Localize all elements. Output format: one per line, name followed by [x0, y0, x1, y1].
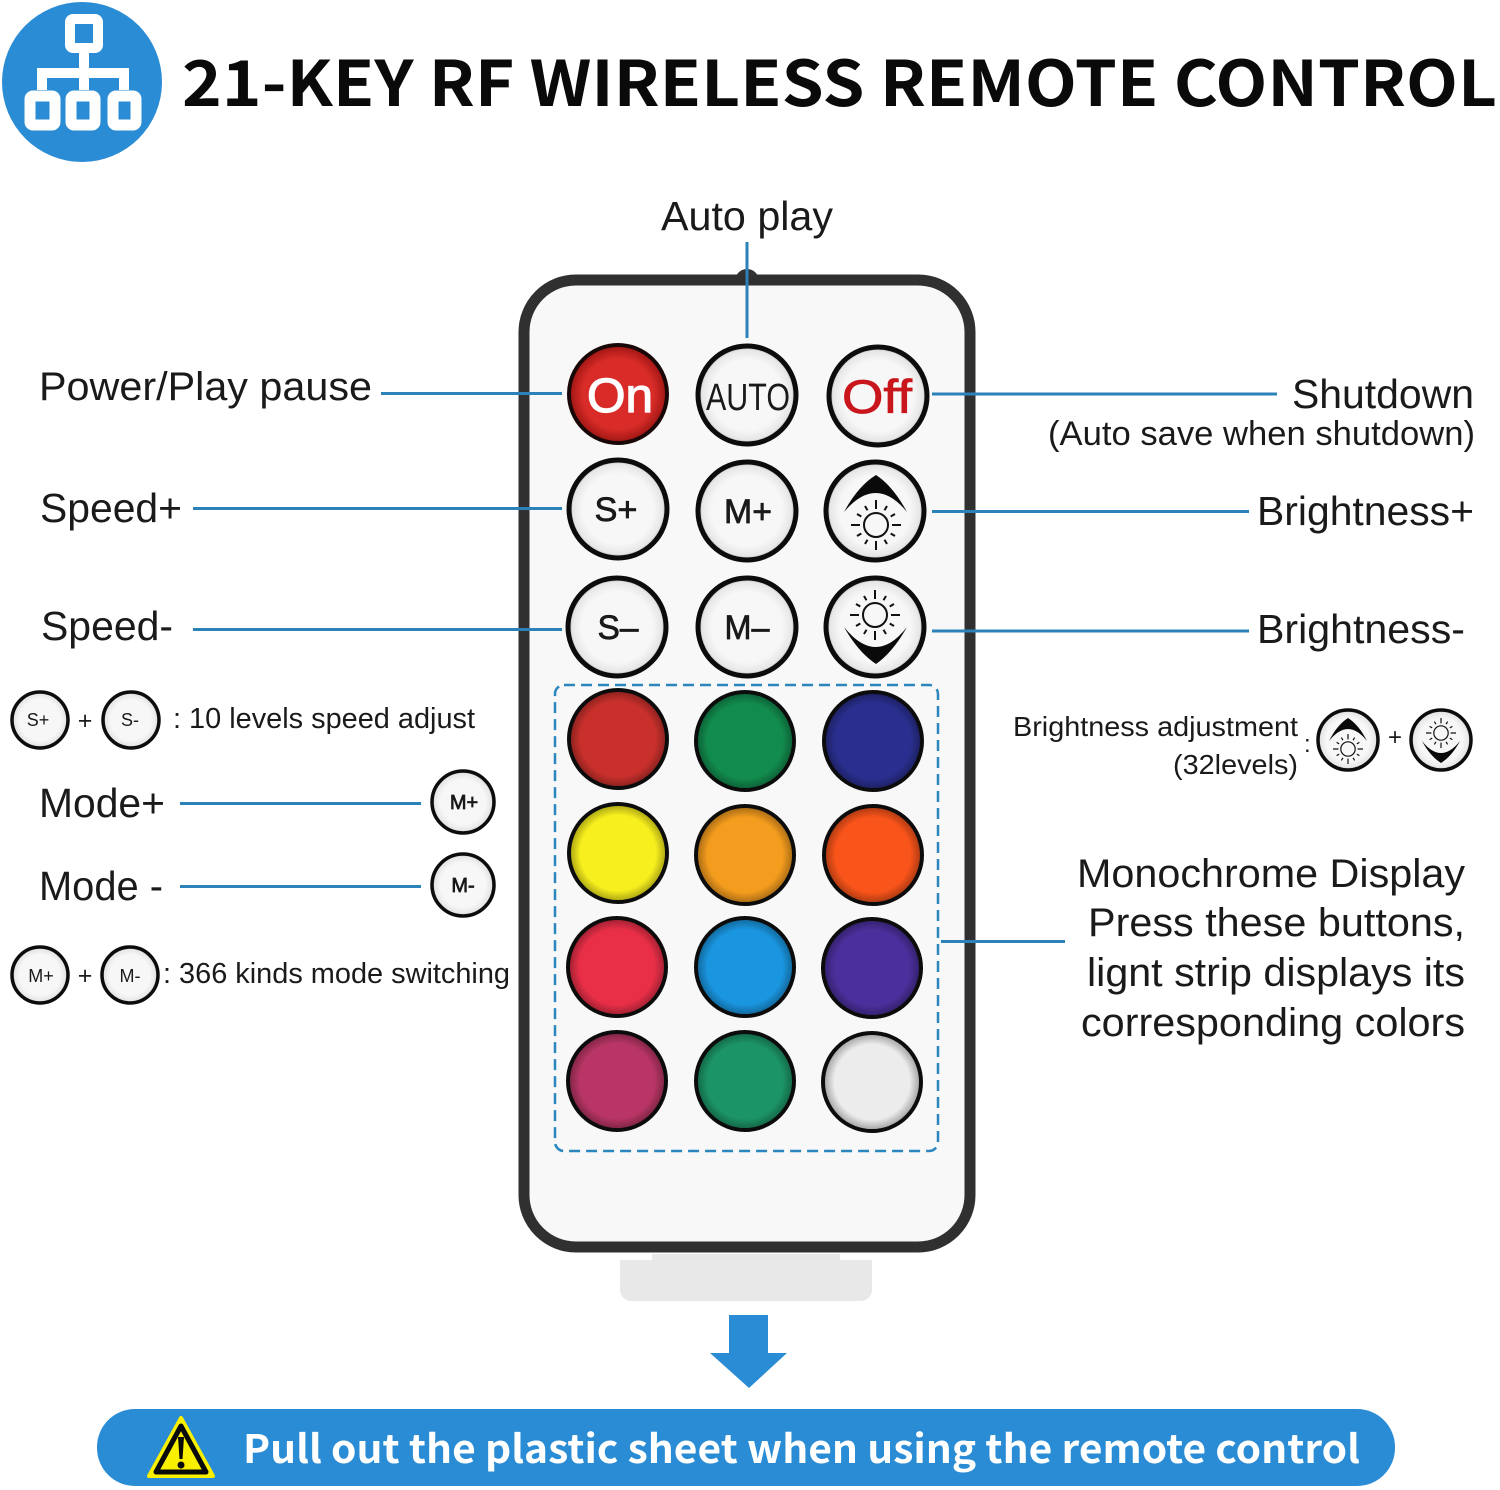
button: On: On: [587, 370, 653, 423]
note: brightness adjustment combination: (32levels): [1173, 749, 1298, 780]
label: Mode+ with button: [39, 771, 494, 833]
button: S+: [569, 460, 667, 558]
button: M-: [698, 578, 796, 676]
note: brightness adjustment combination: :: [1304, 731, 1311, 758]
note: brightness adjustment combination: +: [1388, 724, 1402, 751]
button: Off: [829, 347, 927, 445]
note: mode switching combination: [12, 947, 510, 1003]
label: Monochrome Display description with leader line: corresponding colors: [1081, 1001, 1465, 1045]
button: M-: M–: [724, 609, 770, 647]
button: S-: S–: [598, 609, 639, 647]
label: Brightness- with leader line: Brightness-: [1257, 606, 1465, 652]
note: speed adjust combination: S-: [121, 710, 139, 730]
dashed colour button area: [555, 685, 938, 1151]
label: Mode- with button: Mode -: [39, 863, 163, 909]
button: brightness down: [826, 578, 924, 676]
remote control body: [524, 269, 970, 1301]
label: Mode+ with button: M+: [450, 792, 478, 814]
label: Monochrome Display description with leader line: Press these buttons,: [1088, 901, 1465, 945]
label: Mode- with button: M-: [451, 875, 475, 897]
note: mode switching combination: M+: [28, 966, 54, 986]
note: mode switching combination: +: [78, 962, 92, 990]
label: Shutdown with leader line: (Auto save when shutdown): [1048, 415, 1475, 453]
button: Off: Off: [842, 370, 913, 423]
note: brightness adjustment combination: Brightness adjustment: [1013, 711, 1298, 742]
button: M+: [698, 462, 796, 560]
label: Speed+ with leader line: Speed+: [40, 485, 182, 531]
label: Power/Play pause with leader line: Power/Play pause: [39, 365, 372, 409]
note: speed adjust combination: [12, 692, 475, 748]
label: Monochrome Display description with leader line: [941, 852, 1465, 1045]
note: speed adjust combination: +: [78, 707, 92, 735]
button: AUTO: AUTO: [706, 377, 790, 419]
label: Shutdown with leader line: [932, 371, 1475, 453]
note: speed adjust combination: S+: [27, 710, 49, 730]
label: Brightness+ with leader line: Brightness+: [1257, 488, 1474, 534]
header icon: network hierarchy: [2, 2, 162, 162]
note: mode switching combination: : 366 kinds mode switching: [163, 958, 510, 990]
button: On: [569, 345, 667, 443]
label: Mode+ with button: Mode+: [39, 780, 165, 826]
button: S+: S+: [594, 491, 638, 529]
note: speed adjust combination: : 10 levels speed adjust: [173, 703, 475, 735]
label: Auto play with leader line: Auto play: [661, 193, 833, 239]
label: Shutdown with leader line: Shutdown: [1292, 371, 1474, 417]
button: M+: M+: [724, 493, 772, 531]
banner: pull out plastic sheet: [97, 1409, 1395, 1486]
icon: warning triangle: [149, 1418, 213, 1476]
note: brightness adjustment combination: [1013, 710, 1471, 780]
label: Speed- with leader line: Speed-: [41, 603, 173, 649]
banner text: Pull out the plastic sheet when using the remote control: [243, 1419, 1360, 1475]
label: Monochrome Display description with leader line: lignt strip displays its: [1087, 951, 1465, 995]
colour buttons grid: [568, 690, 922, 1131]
label: Mode- with button: [39, 854, 494, 916]
button: AUTO: [698, 346, 796, 444]
button: brightness up: [826, 462, 924, 560]
button: S-: [568, 578, 666, 676]
title: 21-KEY RF WIRELESS REMOTE CONTROL: [182, 34, 1497, 125]
note: mode switching combination: M-: [120, 966, 140, 986]
label: Monochrome Display description with leader line: Monochrome Display: [1077, 852, 1465, 896]
arrow: pull direction: [710, 1315, 787, 1388]
